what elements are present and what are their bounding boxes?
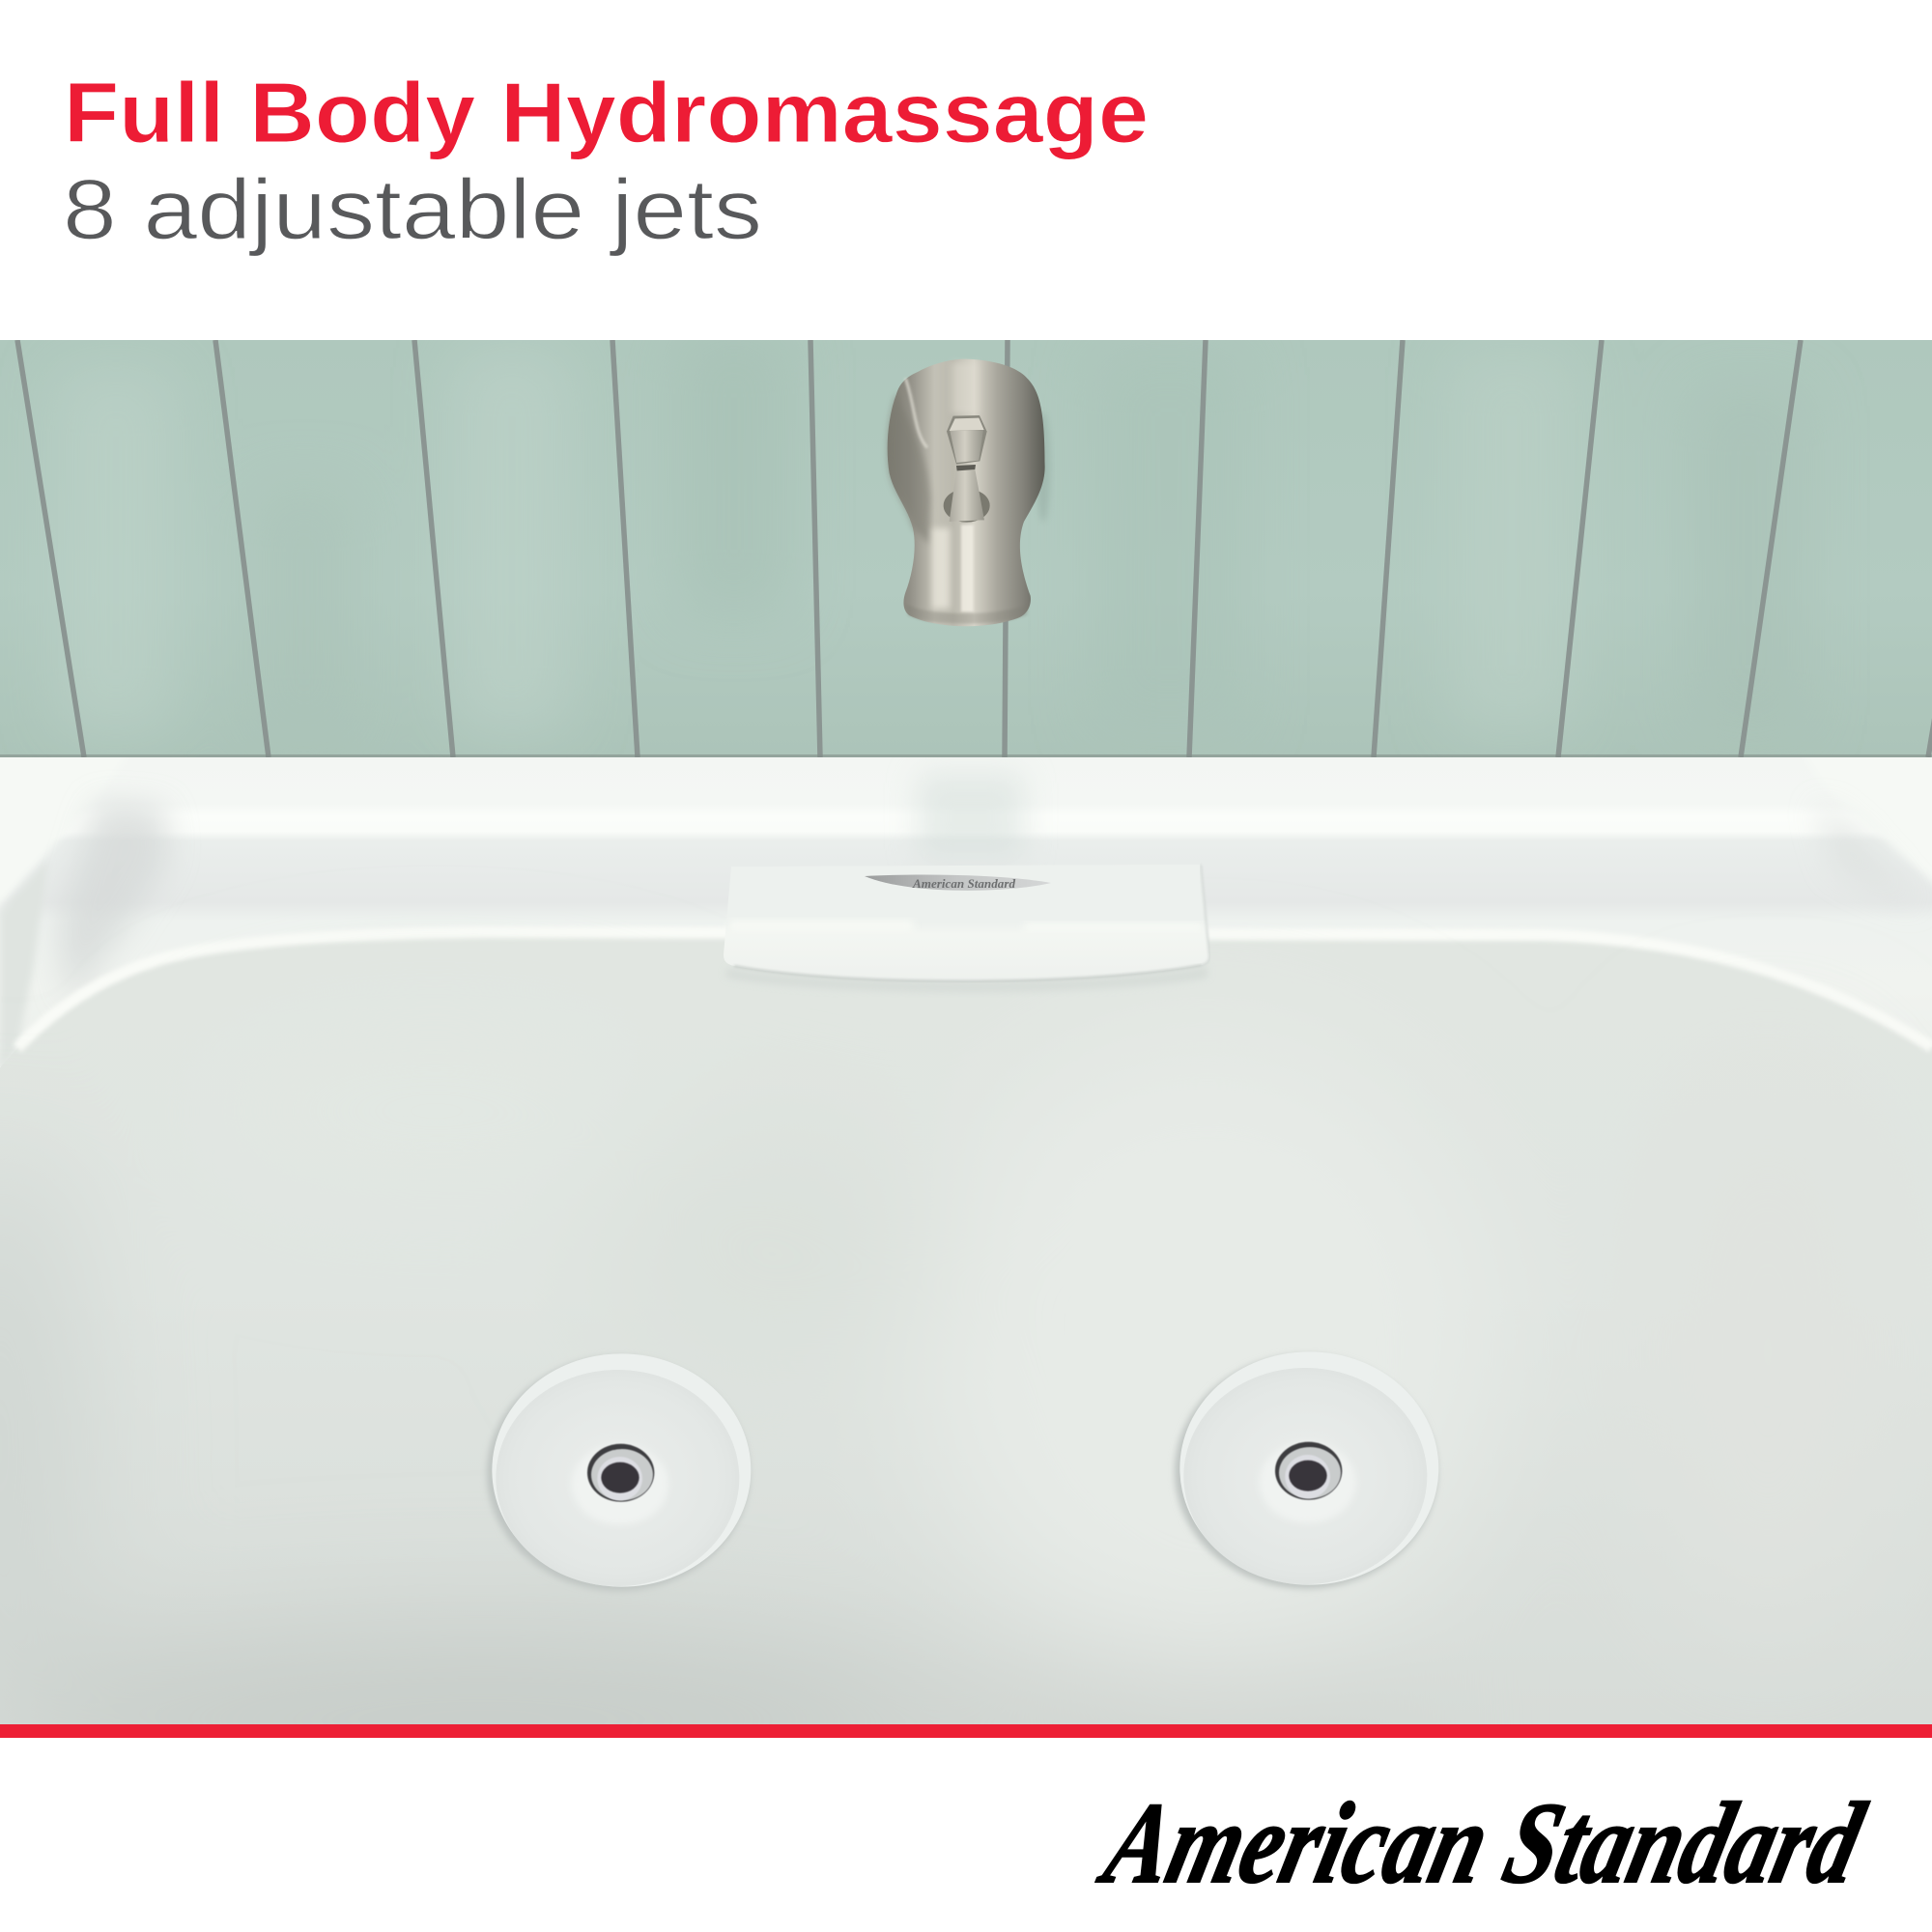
overflow plate: [724, 865, 1209, 992]
title: Full Body Hydromassage: [64, 65, 1149, 160]
left corner shadow: [58, 802, 169, 1005]
faucet reflection: [918, 773, 1024, 860]
basin soft shading: [918, 1034, 1497, 1671]
rim highlight curve: [17, 932, 1932, 1048]
right corner shadow: [1823, 816, 1861, 852]
red divider bar: [0, 1724, 1932, 1738]
icon: left jet: [487, 1353, 751, 1591]
handle recess: [944, 489, 990, 523]
left lower wedge: [0, 875, 42, 1066]
panel: teal plank wall: [0, 328, 1932, 757]
panel: tub rim: [0, 744, 1932, 1806]
icon: right jet: [1175, 1351, 1438, 1589]
right deck corner: [1889, 838, 1932, 881]
subtitle: 8 adjustable jets: [63, 161, 762, 257]
badge: oval logo plate: [865, 874, 1051, 891]
icon: brushed nickel tub spout: [888, 359, 1050, 626]
left deck corner: [0, 838, 56, 905]
highlight streaks on plate: [729, 920, 913, 931]
handle lever: [947, 415, 987, 522]
basin: [0, 932, 1932, 1724]
badge: oval logo plate: American Standard: [912, 876, 1015, 891]
footer white band: [0, 1738, 1932, 1932]
